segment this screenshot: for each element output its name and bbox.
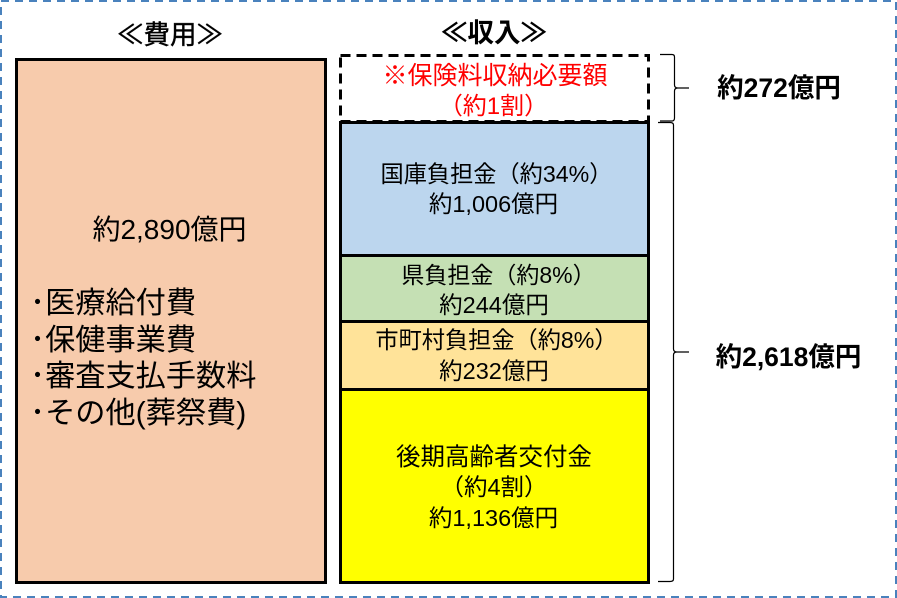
panel: insurance premium required: （約1割） — [439, 93, 548, 120]
label: premium total: 約272億円 — [717, 73, 841, 103]
panel: prefecture share: 約244億円 — [439, 292, 549, 318]
panel: late-stage elderly grant — [340, 390, 648, 582]
bracket: premium — [660, 54, 689, 121]
panel: late-stage elderly grant: 約1,136億円 — [429, 505, 558, 531]
bracket: public funding — [658, 122, 689, 582]
panel: insurance premium required: ※保険料収納必要額 — [382, 62, 608, 90]
panel: national share — [340, 122, 648, 256]
panel: late-stage elderly grant: （約4割） — [440, 474, 548, 500]
costs list: ･医療給付費 — [30, 286, 196, 320]
panel: prefecture share — [340, 256, 648, 322]
costs list: ･審査支払手数料 — [30, 359, 256, 393]
panel: prefecture share: 県負担金（約8%） — [401, 262, 596, 288]
label: funding total: 約2,618億円 — [716, 342, 861, 372]
costs list: ･保健事業費 — [30, 323, 196, 357]
costs list: ･その他(葬祭費) — [30, 396, 246, 430]
panel: national share: 国庫負担金（約34%） — [381, 161, 612, 187]
panel: municipal share: 市町村負担金（約8%） — [375, 327, 618, 353]
panel: municipal share: 約232億円 — [439, 358, 549, 384]
heading: revenue: ≪収入≫ — [441, 18, 547, 48]
costs list — [30, 286, 256, 430]
panel: costs — [16, 60, 326, 582]
panel: national share: 約1,006億円 — [429, 191, 558, 217]
costs total: 約2,890億円 — [92, 214, 247, 245]
heading: costs: ≪費用≫ — [117, 20, 223, 50]
panel: insurance premium required — [340, 56, 648, 122]
panel: municipal share — [340, 322, 648, 390]
panel: late-stage elderly grant: 後期高齢者交付金 — [396, 443, 592, 471]
